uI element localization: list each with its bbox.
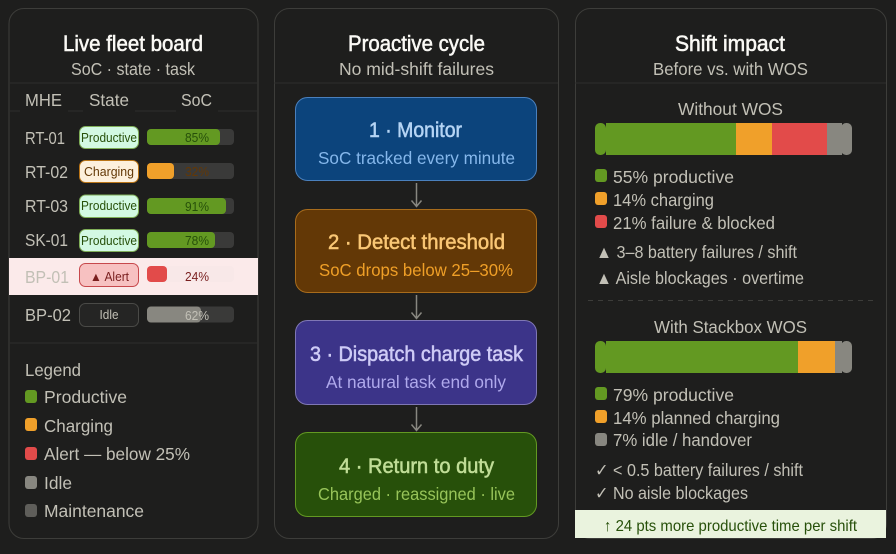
row: RT-03: RT-03 [25, 196, 68, 216]
legend: with Stackbox WOS: 79% productive [613, 385, 734, 405]
step 1: monitor: SoC tracked every minute [318, 148, 515, 168]
row: RT-02: Charging [84, 165, 134, 179]
row: SK-01 [25, 230, 234, 252]
table header: MHE [25, 90, 62, 110]
legend: Charging [44, 416, 113, 436]
warnings: without WOS: ▲ Aisle blockages · overtime [596, 268, 804, 288]
row: RT-03: Productive [81, 199, 137, 213]
panel: proactive cycle [274, 8, 558, 538]
legend: with Stackbox WOS: 7% idle / handover [613, 430, 752, 450]
row: BP-02: 62% [185, 308, 209, 323]
row: BP-01 alert [9, 258, 258, 295]
benefits: with Stackbox WOS: ✓ < 0.5 battery failures / shift [595, 460, 803, 480]
row: BP-02: BP-02 [25, 305, 71, 325]
step 4: return to duty: Charged · reassigned · live [318, 484, 515, 504]
row: RT-02: 32% [185, 164, 209, 179]
row: RT-03: 91% [185, 199, 209, 214]
subheading: proactive cycle: No mid-shift failures [339, 59, 494, 79]
arrow: detect to dispatch [412, 295, 422, 318]
benefits: with Stackbox WOS: ✓ No aisle blockages [595, 483, 748, 503]
legend [25, 360, 190, 521]
legend: Alert — below 25% [44, 444, 190, 464]
step 2: detect threshold: 2 · Detect threshold [328, 230, 505, 254]
row: RT-01: Productive [81, 131, 137, 145]
callout: productive time gain: ↑ 24 pts more productive time per shift [604, 518, 858, 535]
row: SK-01: 78% [185, 233, 209, 248]
step 1: monitor [296, 98, 536, 180]
legend: with Stackbox WOS [595, 385, 780, 450]
step 2: detect threshold [296, 210, 536, 292]
legend: without WOS [595, 167, 775, 233]
heading: shift impact: Shift impact [675, 31, 785, 56]
legend: without WOS: 55% productive [613, 167, 734, 187]
subheading: fleet board: SoC · state · task [71, 59, 195, 79]
row: BP-02 [25, 304, 234, 326]
stacked bar: without WOS [595, 123, 852, 155]
subheading: shift impact: Before vs. with WOS [653, 59, 808, 79]
section label: without WOS: Without WOS [678, 99, 783, 119]
row: RT-01 [25, 126, 234, 148]
legend: Idle [44, 473, 72, 493]
arrow: dispatch to return [412, 407, 422, 430]
warnings: without WOS: ▲ 3–8 battery failures / shift [596, 242, 797, 262]
row: BP-02: Idle [100, 308, 119, 322]
benefits: with Stackbox WOS [595, 460, 803, 503]
row: BP-01 alert: BP-01 [25, 267, 69, 287]
heading: proactive cycle: Proactive cycle [348, 31, 485, 56]
row: SK-01: Productive [81, 234, 137, 248]
row: RT-01: 85% [185, 130, 209, 145]
panel: shift impact [575, 8, 886, 538]
row: RT-03 [25, 195, 234, 218]
arrow: monitor to detect [412, 183, 422, 206]
step 3: dispatch charge task [296, 320, 536, 404]
panel: live fleet board [9, 8, 258, 538]
step 3: dispatch charge task: 3 · Dispatch charge task [310, 342, 523, 366]
row: BP-01 alert: ▲ Alert [90, 270, 130, 284]
legend: Maintenance [44, 501, 144, 521]
step 4: return to duty [296, 432, 536, 516]
warnings: without WOS [596, 242, 804, 288]
callout: productive time gain [575, 510, 886, 538]
row: RT-02: RT-02 [25, 162, 68, 182]
row: RT-02 [25, 160, 234, 182]
legend: with Stackbox WOS: 14% planned charging [613, 408, 780, 428]
step 3: dispatch charge task: At natural task end only [326, 372, 506, 392]
section label: with Stackbox WOS: With Stackbox WOS [654, 317, 807, 337]
step 1: monitor: 1 · Monitor [369, 118, 462, 142]
legend: without WOS: 14% charging [613, 190, 714, 210]
legend: without WOS: 21% failure & blocked [613, 213, 775, 233]
row: RT-01: RT-01 [25, 128, 65, 148]
legend: Legend [25, 360, 81, 380]
row: BP-01 alert: 24% [185, 269, 209, 284]
table header: State [89, 90, 129, 110]
step 4: return to duty: 4 · Return to duty [339, 454, 494, 478]
step 2: detect threshold: SoC drops below 25–30% [319, 260, 513, 280]
table header [25, 90, 212, 110]
legend: Productive [44, 387, 127, 407]
row: SK-01: SK-01 [25, 230, 68, 250]
table header: SoC [181, 90, 212, 110]
stacked bar: with Stackbox WOS [595, 341, 852, 373]
heading: live fleet board: Live fleet board [63, 31, 203, 56]
